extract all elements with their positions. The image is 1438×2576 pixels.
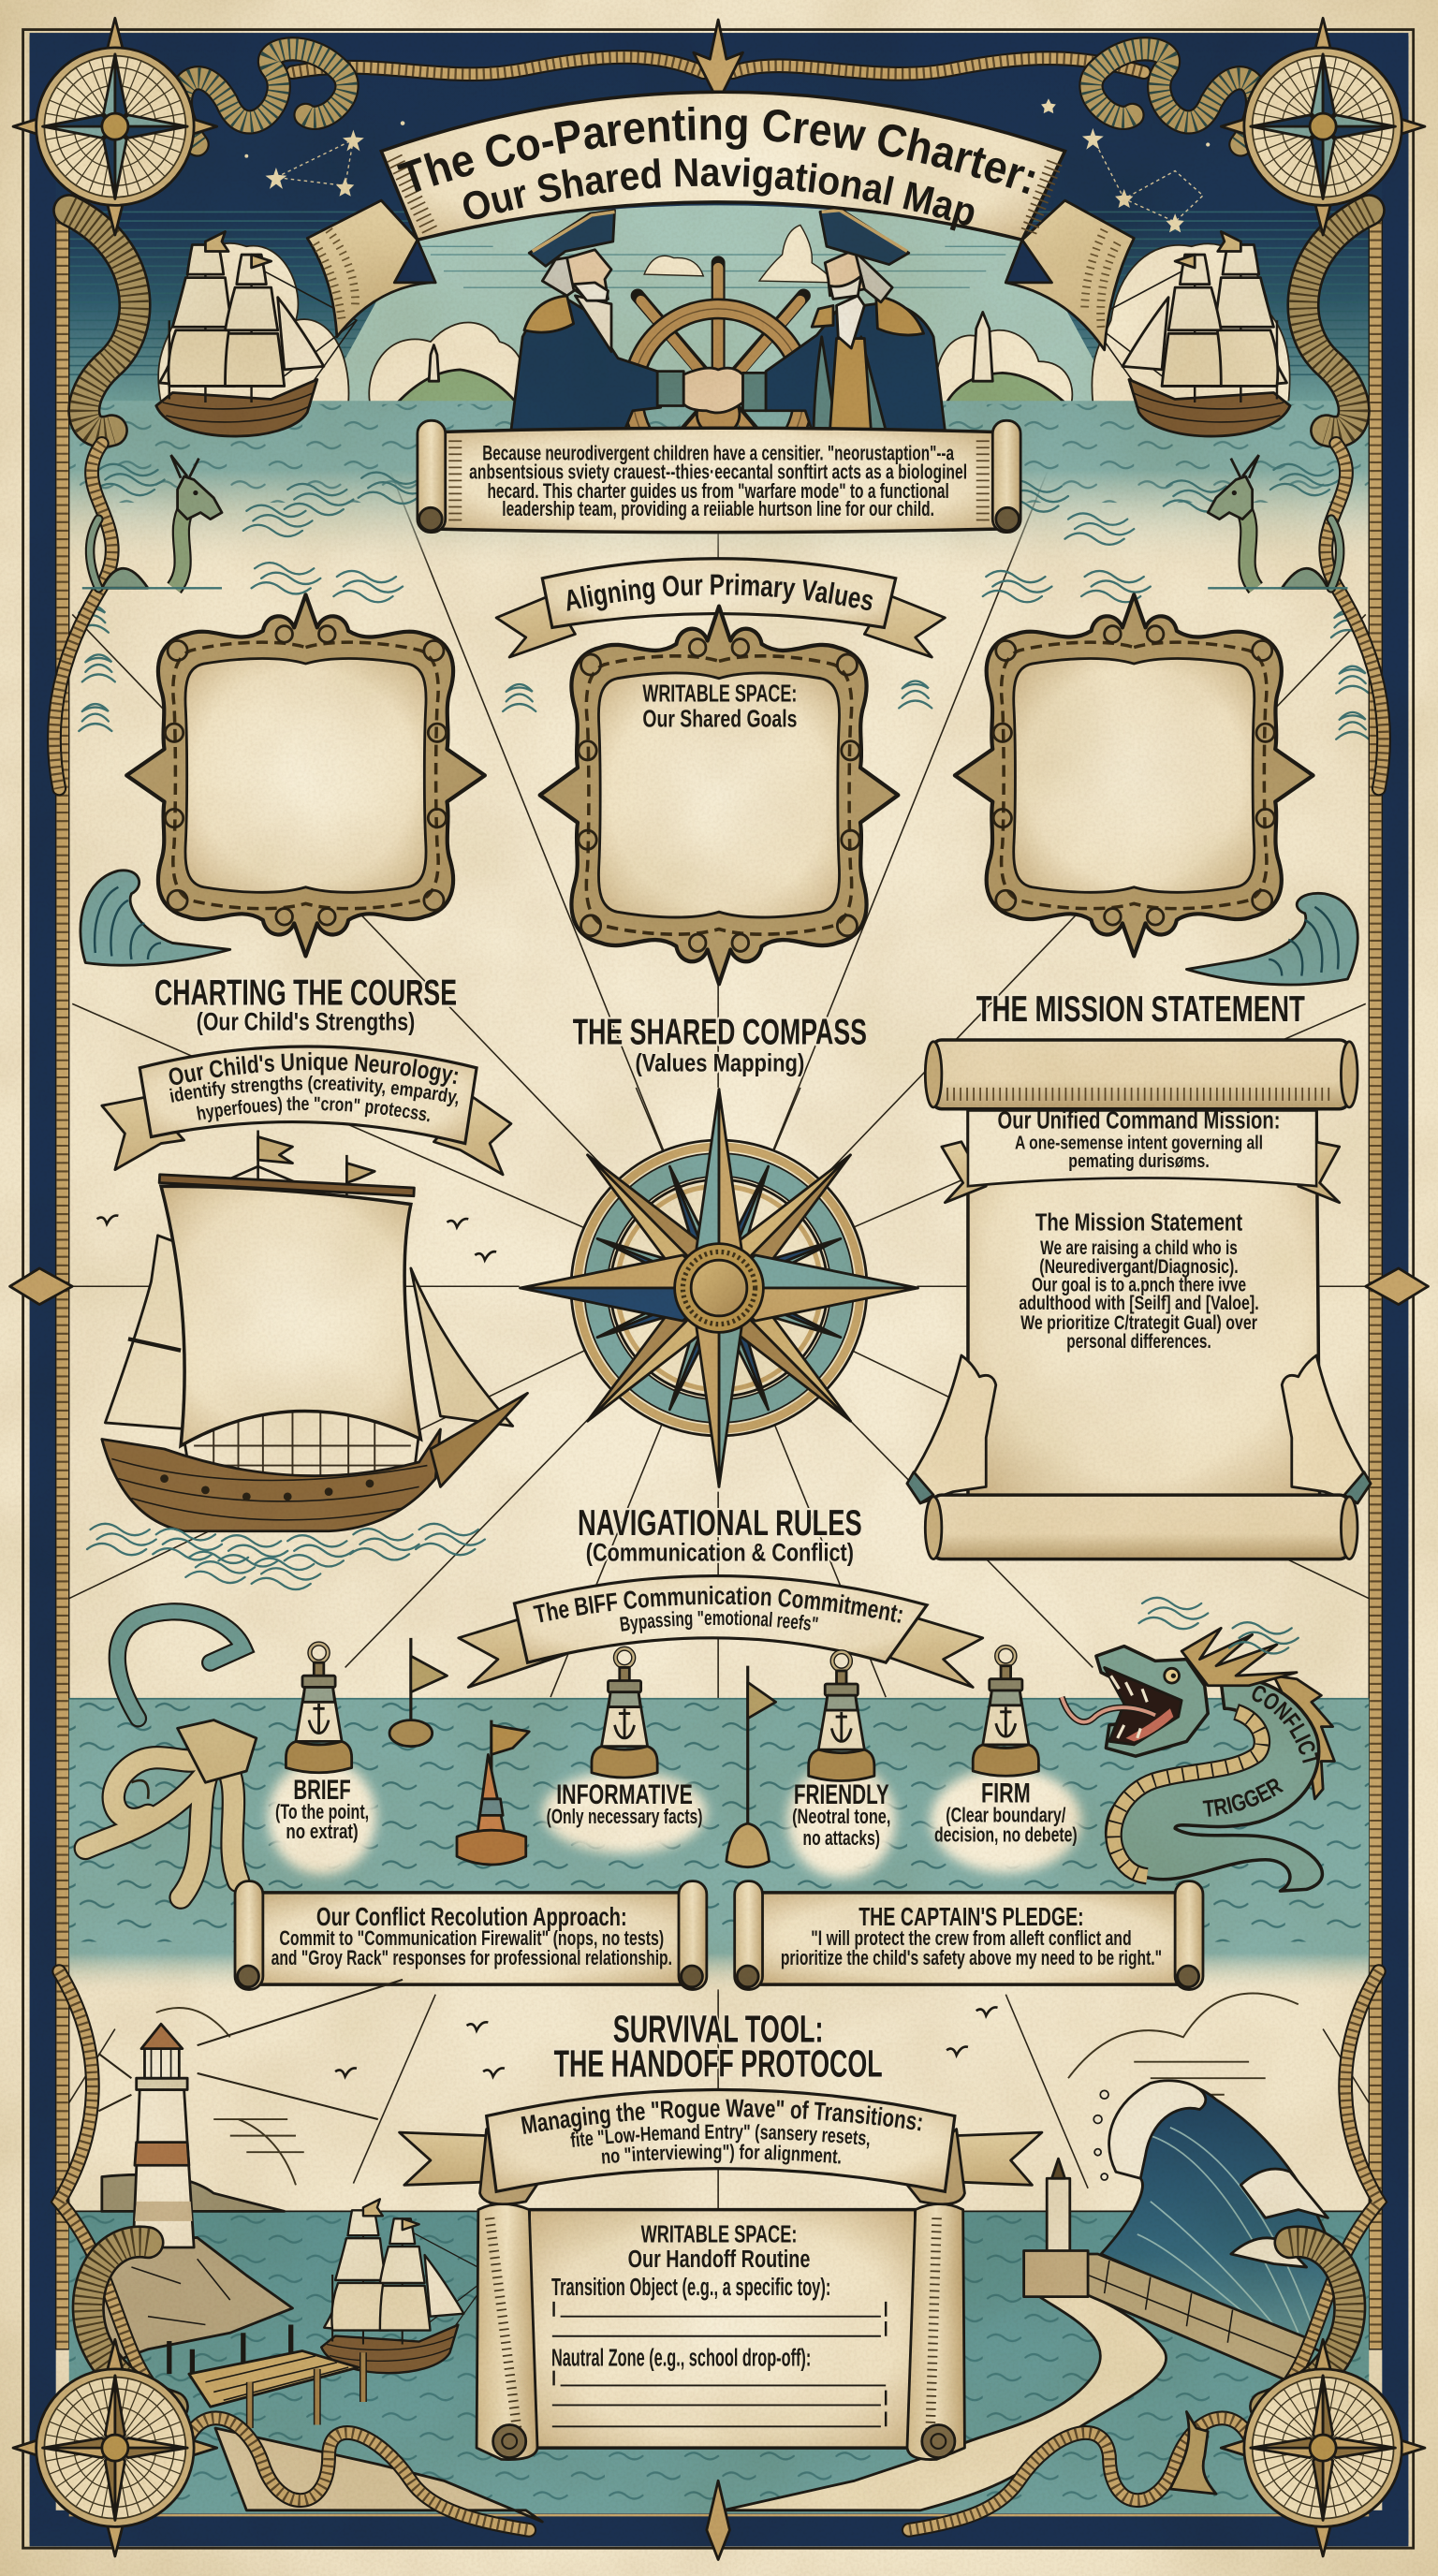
handoff ribbon <box>400 2089 1042 2204</box>
buoy: brief <box>275 1644 369 1843</box>
label: decision, no debete) <box>934 1822 1078 1846</box>
text <box>781 1902 1162 1969</box>
handoff ribbon: fite "Low-Hemand Entry" (sansery resets, <box>569 2120 872 2152</box>
writable frame right <box>955 594 1313 956</box>
right side ornament <box>1366 1268 1428 1305</box>
mission statement text: Our goal is to a.pnch there ivve <box>1032 1275 1246 1296</box>
wooden dock <box>169 2324 363 2428</box>
rope and serpent ornaments top <box>181 49 1257 144</box>
buoy: friendly <box>792 1652 890 1850</box>
mission scroll with hands <box>907 1040 1371 1559</box>
ribbon text: Managing the "Rogue Wave" of Transitions: <box>519 2093 925 2140</box>
tongue <box>1062 1697 1155 1722</box>
write-in lines <box>552 2302 886 2426</box>
handoff text: Our Handoff Routine <box>628 2245 810 2273</box>
heading: shared compass <box>573 1013 867 1076</box>
label: (Only necessary facts) <box>547 1805 702 1828</box>
writable space label: Our Shared Goals <box>642 707 797 733</box>
command mission ribbon <box>942 1142 986 1203</box>
label: INFORMATIVE <box>556 1779 693 1810</box>
hull <box>102 1429 440 1531</box>
mission statement text: The Mission Statement <box>1035 1208 1242 1237</box>
left coast <box>102 2174 292 2365</box>
sailing ship right <box>1090 231 1290 436</box>
label: (To the point, <box>275 1800 369 1823</box>
corner compass bottom left <box>13 2339 217 2556</box>
ship in harbor <box>321 2199 492 2373</box>
buoy: firm <box>934 1647 1078 1846</box>
text: Our Conflict Recolution Approach: <box>316 1902 627 1931</box>
big rogue wave <box>1093 2081 1347 2365</box>
stars <box>244 98 1210 232</box>
beach path <box>723 2287 1167 2510</box>
label: FRIENDLY <box>794 1779 889 1810</box>
ship wheel <box>633 263 805 493</box>
heading: navigational rules: NAVIGATIONAL RULES <box>578 1503 862 1544</box>
kraken left <box>85 1612 257 1897</box>
label <box>792 1779 890 1850</box>
lower serpent ropes <box>59 1971 1379 2530</box>
central compass rose <box>521 1090 917 1486</box>
large ship <box>87 1131 527 1589</box>
text: THE CAPTAIN'S PLEDGE: <box>858 1902 1084 1931</box>
command mission text <box>998 1106 1280 1172</box>
values heading: Aligning Our Primary Values <box>567 573 873 611</box>
command mission text: A one-semense intent governing all <box>1015 1133 1263 1154</box>
neurology ribbon: hyperfoues) the "cron" protecss. <box>197 1096 430 1123</box>
head <box>1096 1647 1208 1756</box>
top center ornament <box>694 20 742 102</box>
clouds <box>158 225 1290 402</box>
heading: mission statement: THE MISSION STATEMENT <box>976 989 1305 1030</box>
mission statement text: We prioritize C/trategit Gual) over <box>1020 1312 1257 1334</box>
writable frame left <box>126 594 485 956</box>
neurology ribbon: identify strengths (creativity, empardy, <box>169 1076 459 1106</box>
marker flags and cone buoy <box>389 1638 776 1867</box>
ocean top <box>69 401 1369 739</box>
heading: charting the course <box>154 973 457 1035</box>
captain's pledge scroll <box>735 1881 1203 1989</box>
breaking wave right <box>1186 893 1357 985</box>
bottom roll <box>925 1495 1357 1559</box>
middle sea <box>69 1699 1369 1995</box>
handoff text: Nautral Zone (e.g., school drop-off): <box>551 2343 811 2371</box>
heading: navigational rules <box>578 1503 862 1566</box>
breaking wave left <box>81 871 230 965</box>
radial chart lines from the compass <box>69 346 1372 2211</box>
left hand <box>907 1355 996 1503</box>
left lighthouse <box>133 2024 194 2247</box>
corner compass top left <box>13 18 217 235</box>
mission statement text: We are raising a child who is <box>1040 1237 1238 1259</box>
corner compass top right <box>1221 18 1425 235</box>
buoy: informative <box>547 1648 702 1828</box>
label: (Clear boundary/ <box>946 1803 1065 1826</box>
label <box>547 1779 702 1828</box>
heading: shared compass: (Values Mapping) <box>635 1047 804 1076</box>
label: no extrat) <box>286 1820 359 1843</box>
mission statement text: adulthood with [Seilf] and [Valoe]. <box>1019 1293 1259 1314</box>
left side ornament <box>10 1268 72 1305</box>
label: (Neotral tone, <box>792 1805 890 1828</box>
ribbon text: The BIFF Communication Commitment: <box>533 1586 902 1623</box>
side serpents <box>54 211 1384 788</box>
mission statement text: (Neuredivergant/Diagnosic). <box>1039 1256 1239 1278</box>
intro text: hecard. This charter guides us from "warfare mode" to a functional <box>487 479 949 503</box>
sea dragon with conflict trigger <box>1062 1628 1334 1891</box>
dorsal spines <box>1273 1676 1334 1799</box>
scroll body <box>968 1101 1320 1499</box>
bottom sea <box>69 2211 1369 2513</box>
writable frame center <box>540 607 898 984</box>
heading: shared compass: THE SHARED COMPASS <box>573 1013 867 1053</box>
bottom center ornament <box>707 2481 729 2559</box>
title line two: Our Shared Navigational Map <box>463 157 974 231</box>
intro text: leadership team, providing a reiiable hurtson line for our child. <box>502 497 934 520</box>
birds <box>97 1216 496 1260</box>
sky panel with stars <box>30 33 1408 404</box>
rigging and flags <box>205 1131 346 1203</box>
islands and distant lighthouses <box>398 312 1068 406</box>
handshake <box>683 368 742 413</box>
heading: charting the course: (Our Child's Strengths) <box>197 1006 415 1035</box>
text islands <box>268 1760 1081 1878</box>
corner compass bottom right <box>1221 2339 1425 2556</box>
text: and "Groy Rack" responses for professional relationship. <box>271 1946 672 1969</box>
back sail <box>105 1236 189 1429</box>
handoff text: WRITABLE SPACE: <box>641 2220 797 2248</box>
conflict resolution scroll <box>235 1881 707 1989</box>
top roll <box>925 1040 1357 1109</box>
text: "I will protect the crew from alleft conflict and <box>811 1926 1132 1950</box>
heading: survival tool: THE HANDOFF PROTOCOL <box>554 2042 883 2085</box>
label: no attacks) <box>803 1826 880 1850</box>
right sail <box>411 1268 513 1426</box>
neurology ribbon <box>102 1046 511 1175</box>
captains shaking hands at the helm <box>511 209 945 493</box>
conflict label: CONFLICT <box>1253 1685 1320 1764</box>
distant waves right of ribbon <box>1139 1598 1299 1654</box>
head crest <box>1181 1628 1297 1686</box>
sea monster right <box>1208 455 1347 588</box>
BIFF ribbon: Bypassing "emotional reefs" <box>620 1610 818 1634</box>
breakwater and small lighthouse <box>1024 2159 1314 2385</box>
handoff ribbon: no "interviewing") for alignment. <box>600 2140 843 2169</box>
trigger label: TRIGGER <box>1202 1773 1287 1822</box>
heading: survival tool: SURVIVAL TOOL: <box>613 2008 823 2051</box>
lower left rocks <box>215 2428 542 2522</box>
label: FIRM <box>981 1778 1031 1808</box>
label: BRIEF <box>293 1775 351 1806</box>
BIFF ribbon <box>459 1576 983 1687</box>
sea monster left <box>82 455 222 588</box>
title ribbon <box>307 92 1134 350</box>
right hand <box>1282 1355 1371 1503</box>
intro scroll <box>418 420 1020 533</box>
ribbon text: Our Child's Unique Neurology: <box>169 1052 459 1087</box>
writable space label <box>642 681 797 733</box>
small serpent near bottom right <box>1170 2411 1216 2494</box>
heading: charting the course: CHARTING THE COURSE <box>154 973 457 1014</box>
handoff text <box>551 2220 830 2371</box>
text: prioritize the child's safety above my need to be right." <box>781 1946 1162 1969</box>
mission statement text: personal differences. <box>1066 1331 1211 1353</box>
command mission text: pemating durisøms. <box>1068 1150 1210 1172</box>
right captain <box>742 209 945 431</box>
belly <box>1114 1712 1262 1876</box>
main sail <box>161 1186 420 1445</box>
waves under ship <box>87 1524 485 1589</box>
intro text: anbsentsious sviety crauest--thies·eecantal sonftirt acts as a biologinel <box>469 461 967 484</box>
handoff text: Transition Object (e.g., a specific toy): <box>551 2273 830 2301</box>
sailing ship left <box>156 231 357 436</box>
compass points <box>521 1090 917 1486</box>
text: Commit to "Communication Firewalit" (nops, no tests) <box>279 1926 664 1950</box>
mission statement text <box>1019 1208 1259 1353</box>
label <box>934 1778 1078 1846</box>
label <box>275 1775 369 1843</box>
writable space label: WRITABLE SPACE: <box>642 681 797 707</box>
heading: navigational rules: (Communication & Conflict) <box>586 1537 854 1566</box>
handoff scroll <box>477 2203 964 2460</box>
constellations <box>276 138 1203 222</box>
text <box>271 1902 672 1969</box>
intro text <box>469 441 967 520</box>
intro text: Because neurodivergent children have a censitier. "neorustaption"--a <box>482 441 955 464</box>
left captain <box>511 211 683 431</box>
command mission text: Our Unified Command Mission: <box>998 1106 1280 1134</box>
shrouds <box>184 1408 419 1499</box>
heading: survival tool <box>554 2008 883 2085</box>
dragon body <box>1107 1679 1322 1891</box>
sky sketch lines and birds <box>98 1980 1299 2185</box>
title line one: The Co-Parenting Crew Charter: <box>397 107 1035 195</box>
values ribbon <box>496 559 945 657</box>
